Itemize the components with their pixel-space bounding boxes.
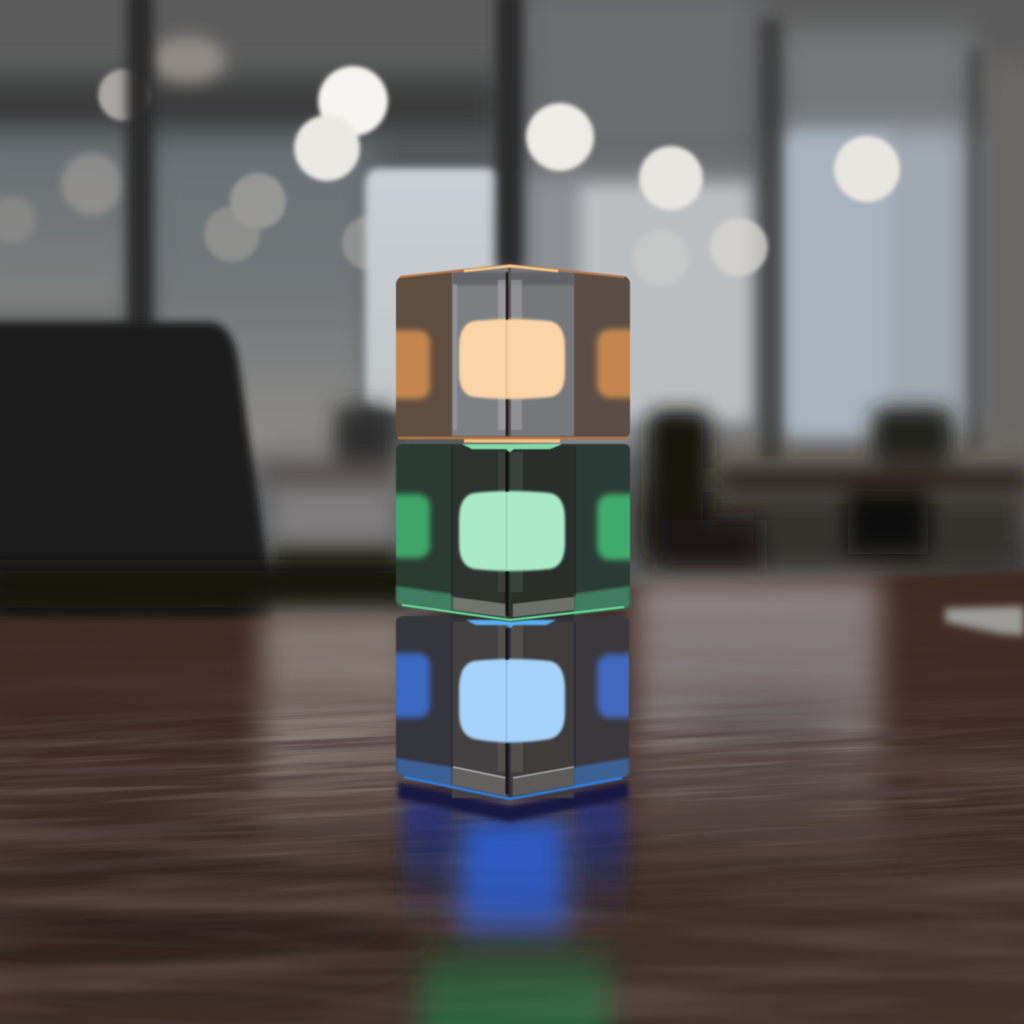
base tint bbox=[396, 758, 452, 786]
top green glow bbox=[462, 444, 562, 452]
centre panes bbox=[452, 446, 508, 618]
centre edge bbox=[505, 452, 509, 616]
bottom glowing edge bbox=[404, 777, 622, 799]
background chairs and far table bbox=[265, 405, 1024, 598]
cube reflection on table bbox=[398, 782, 628, 1024]
bottom glowing edge bbox=[402, 605, 624, 620]
centre panes bbox=[452, 622, 508, 798]
table surface with window reflections bbox=[0, 570, 1024, 1024]
side glow reflections bbox=[384, 494, 643, 560]
darker lower-left area bbox=[0, 870, 430, 990]
side faces bbox=[396, 616, 452, 786]
side faces bbox=[396, 271, 452, 439]
top glowing edge bbox=[400, 265, 624, 277]
reflection of windows, left of cubes bbox=[262, 612, 412, 862]
centre edge bbox=[505, 628, 509, 794]
central glow bbox=[459, 659, 565, 742]
cube: green (middle) bbox=[384, 444, 643, 622]
reflection of windows, right of cubes bbox=[636, 580, 880, 890]
large dark chair at left bbox=[0, 322, 410, 625]
side glow reflections bbox=[384, 329, 643, 399]
cube: blue (bottom) bbox=[384, 616, 643, 800]
bokeh lights bbox=[294, 66, 900, 286]
side glow reflections bbox=[384, 653, 643, 718]
top blue glow bbox=[466, 620, 556, 628]
side faces bbox=[396, 444, 452, 612]
wood grain overlay bbox=[0, 702, 1024, 874]
bottom glowing edge bbox=[398, 437, 628, 439]
window mullions bbox=[127, 0, 982, 460]
base tint bbox=[396, 586, 452, 612]
dim bokeh behind the window frames bbox=[0, 36, 396, 270]
cube: orange (top) bbox=[384, 264, 643, 441]
central glow bbox=[459, 491, 565, 571]
bright window panels bbox=[365, 168, 503, 412]
paper on the table at right bbox=[945, 606, 1024, 636]
centre edge bbox=[506, 272, 508, 436]
background: blurred office interior bbox=[0, 0, 1024, 640]
broad soft streaks bbox=[0, 680, 1024, 1018]
centre panes bbox=[452, 266, 508, 436]
central glow bbox=[459, 319, 565, 399]
